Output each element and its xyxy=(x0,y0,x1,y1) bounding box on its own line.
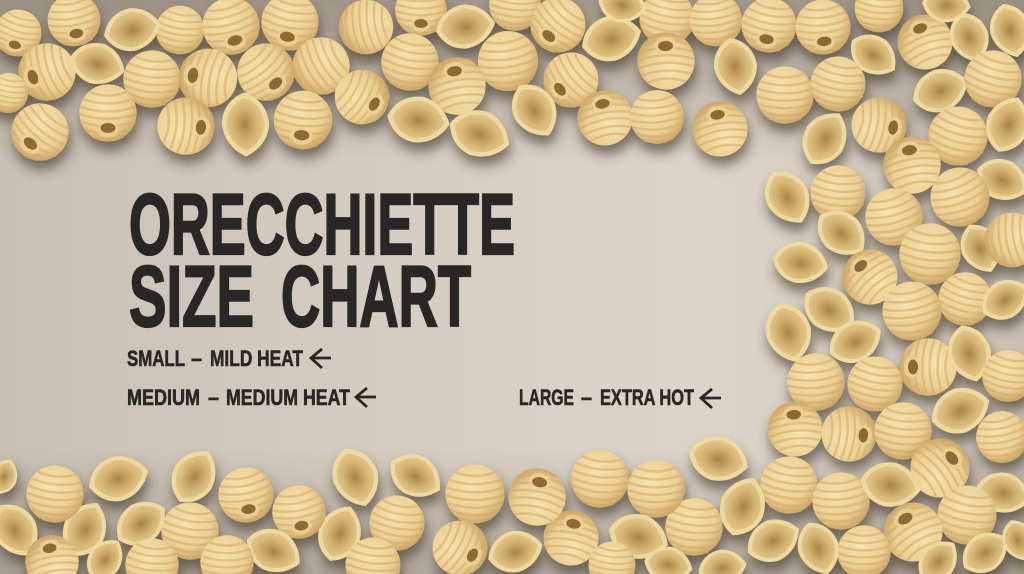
icon: arrow small xyxy=(311,349,331,368)
icon: arrow medium xyxy=(356,388,376,407)
label: large, extra hot: LARGE xyxy=(519,385,574,410)
title: SIZE xyxy=(129,249,254,345)
label: medium, medium heat: MEDIUM xyxy=(127,385,200,410)
label: medium, medium heat: MEDIUM HEAT xyxy=(226,385,350,410)
title: CHART xyxy=(281,249,471,345)
label: medium, medium heat: – xyxy=(208,385,219,410)
title: ORECCHIETTE xyxy=(129,177,515,273)
label: medium, medium heat xyxy=(127,385,376,410)
label: small, mild heat xyxy=(127,346,331,371)
pasta border: top xyxy=(0,0,1024,172)
label: large, extra hot xyxy=(519,385,721,410)
label: large, extra hot: – xyxy=(581,385,592,410)
title xyxy=(129,177,515,345)
label: small, mild heat: SMALL xyxy=(127,346,185,371)
label: small, mild heat: – xyxy=(191,346,202,371)
label: small, mild heat: MILD HEAT xyxy=(210,346,303,371)
pasta border: bottom xyxy=(0,426,1024,574)
icon: arrow large xyxy=(701,389,721,408)
label: large, extra hot: EXTRA HOT xyxy=(600,385,694,410)
pasta border: right xyxy=(755,90,1024,467)
